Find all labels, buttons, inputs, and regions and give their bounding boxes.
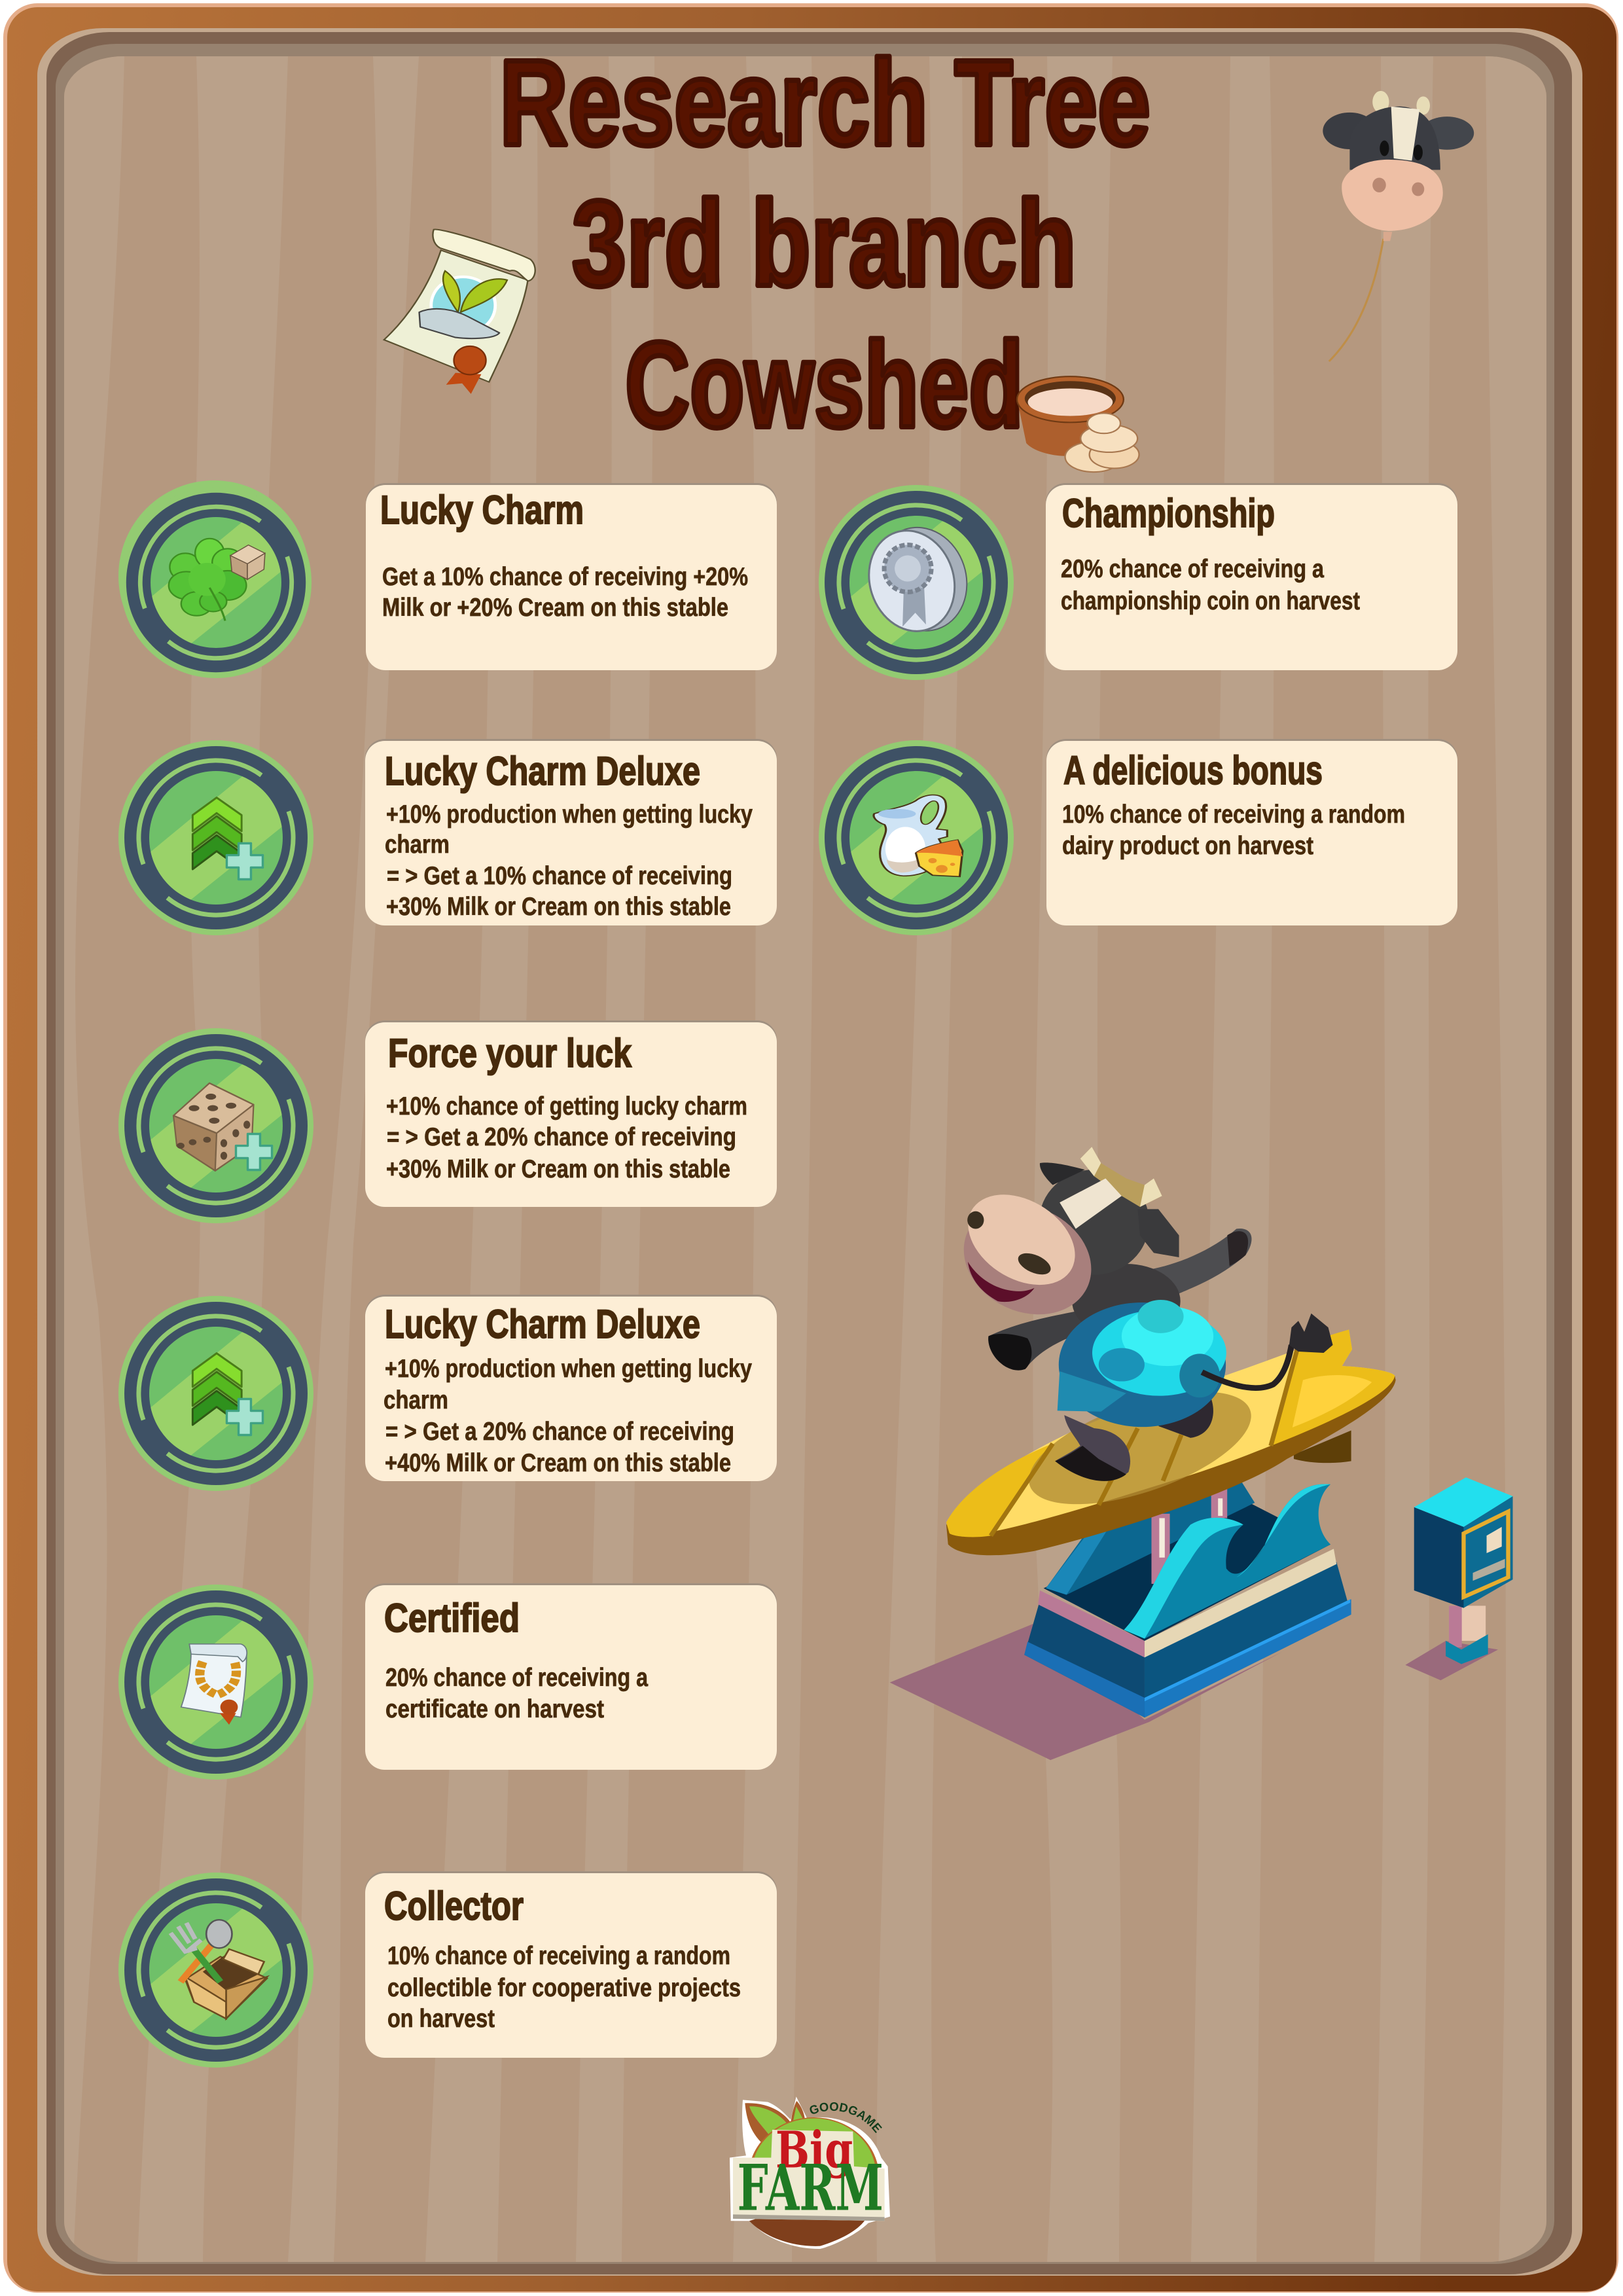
logo: Goodgame Big Farm: Big (776, 2121, 853, 2180)
card: Collector: collectible for cooperative projects (387, 1974, 741, 2002)
card: Lucky Charm (366, 483, 777, 670)
card: Certified: 20% chance of receiving a (385, 1664, 648, 1692)
logo: Goodgame Big Farm: FARM (738, 2151, 883, 2225)
card: Certified: certificate on harvest (385, 1695, 604, 1723)
card: Championship: 20% chance of receiving a (1061, 555, 1324, 583)
card: Lucky Charm: Milk or +20% Cream on this stable (382, 594, 728, 622)
card: Lucky Charm Deluxe: = > Get a 20% chance of receiving (385, 1418, 734, 1446)
icon: cream bowl (1017, 376, 1139, 472)
card: Force your luck (365, 1020, 777, 1207)
icon: championship coin badge (819, 485, 1014, 680)
card: Certified: Certified (384, 1596, 520, 1640)
wave (1124, 1484, 1330, 1639)
card: A delicious bonus (1046, 739, 1457, 925)
card: Certified (365, 1583, 777, 1770)
panel: Collector (118, 1871, 777, 2068)
card: Championship: championship coin on harvest (1061, 587, 1360, 615)
panel: Lucky Charm Deluxe (second) (118, 1295, 777, 1491)
poles (1151, 1514, 1170, 1584)
panel: A delicious bonus (819, 739, 1457, 935)
panel: Force your luck (118, 1020, 777, 1223)
card: Lucky Charm: Lucky Charm (380, 488, 584, 532)
icon: milk jug and cheese badge (819, 740, 1014, 935)
card: A delicious bonus: dairy product on harvest (1062, 832, 1313, 860)
card: Lucky Charm Deluxe: +30% Milk or Cream on this stable (386, 893, 731, 921)
icon: certificate badge (118, 1585, 313, 1780)
logo: Goodgame Big Farm (730, 2097, 890, 2249)
card: Collector: on harvest (387, 2005, 495, 2033)
card: Lucky Charm Deluxe (365, 739, 777, 925)
panel: Lucky Charm (118, 480, 777, 678)
card: Collector: 10% chance of receiving a random (387, 1942, 730, 1970)
card: Lucky Charm Deluxe: Lucky Charm Deluxe (385, 1302, 700, 1346)
card: Collector (365, 1871, 777, 2058)
illustration: surfing cow statue (890, 1147, 1396, 1760)
card: Collector: Collector (384, 1884, 524, 1928)
logo: Goodgame Big Farm: GOODGAME (810, 2102, 882, 2134)
card: Lucky Charm Deluxe (365, 1295, 777, 1481)
statue base (1024, 1481, 1351, 1717)
title: Research Tree (499, 35, 1150, 171)
icon: clover badge (118, 480, 312, 678)
card: A delicious bonus: A delicious bonus (1063, 748, 1323, 793)
card: Lucky Charm Deluxe: charm (385, 831, 450, 859)
illustration: coin box (1405, 1477, 1513, 1680)
card: Lucky Charm Deluxe: +40% Milk or Cream on this stable (385, 1449, 731, 1477)
card: Force your luck: Force your luck (388, 1031, 632, 1075)
panel: Championship (819, 483, 1457, 680)
card: A delicious bonus: 10% chance of receiving a random (1062, 800, 1405, 829)
icon: cow balloon (1323, 91, 1474, 361)
icon: chevrons badge (118, 1296, 313, 1491)
card: Lucky Charm Deluxe: charm (383, 1386, 448, 1414)
card: Lucky Charm Deluxe: +10% production when getting lucky (385, 1355, 752, 1383)
cow figure (943, 1147, 1333, 1481)
icon: research scroll (384, 229, 535, 394)
panel: Lucky Charm Deluxe (first) (118, 739, 777, 935)
card: Lucky Charm Deluxe: = > Get a 10% chance of receiving (387, 862, 732, 890)
card: Championship (1046, 483, 1457, 670)
icon: dice badge (118, 1028, 313, 1223)
card: Lucky Charm Deluxe: Lucky Charm Deluxe (385, 749, 700, 793)
card: Force your luck: +10% chance of getting lucky charm (386, 1092, 747, 1121)
surfboard (946, 1330, 1396, 1555)
panel: Certified (118, 1583, 777, 1780)
card: Force your luck: = > Get a 20% chance of receiving (387, 1123, 736, 1151)
icon: tools and box badge (118, 1873, 313, 2068)
title: 3rd branch (572, 176, 1077, 312)
card: Lucky Charm Deluxe: +10% production when getting lucky (386, 800, 753, 829)
icon: chevrons badge (118, 740, 313, 935)
title (499, 35, 1150, 453)
shadow (890, 1623, 1282, 1760)
title: Cowshed (625, 317, 1024, 453)
card: Lucky Charm: Get a 10% chance of receiving +20% (382, 563, 748, 591)
card: Force your luck: +30% Milk or Cream on this stable (386, 1155, 730, 1183)
card: Championship: Championship (1062, 491, 1275, 535)
